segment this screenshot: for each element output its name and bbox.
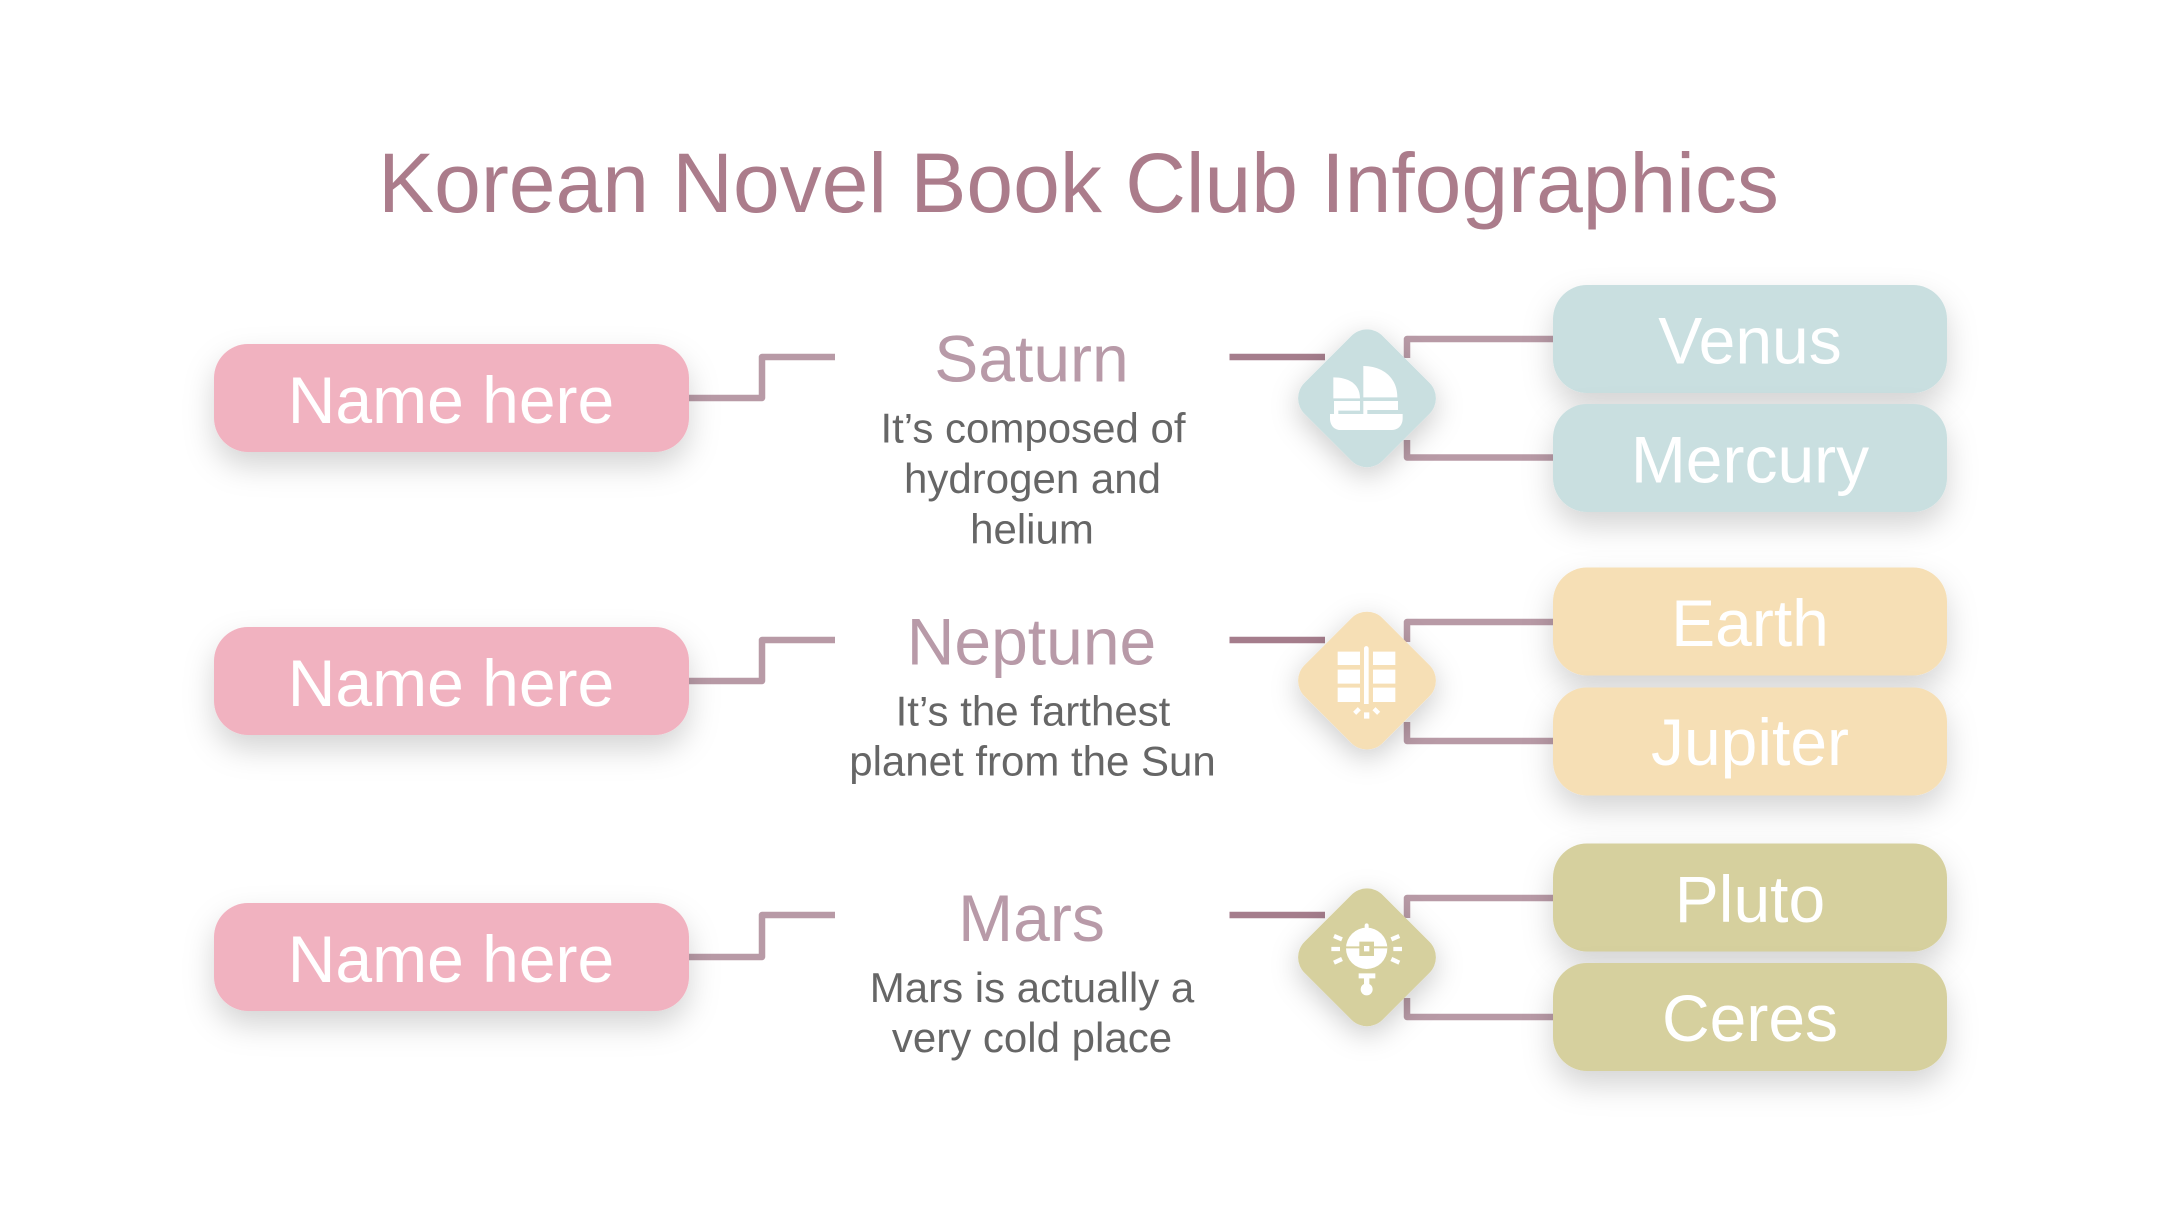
text: Mars: very cold place [892, 1014, 1172, 1061]
pill: Venus: Venus [1658, 304, 1842, 378]
text: Saturn [880, 322, 1186, 552]
connector: icon to Earth and Jupiter [1407, 622, 1553, 741]
pill: Pluto: Pluto [1675, 862, 1825, 936]
pill: name here [214, 344, 689, 452]
icon: ship in diamond [1289, 320, 1445, 476]
text: Mars: Mars [958, 881, 1105, 955]
connector: Saturn to icon [1230, 354, 1325, 360]
pill: Jupiter [1553, 688, 1947, 796]
pill: Jupiter: Jupiter [1651, 705, 1849, 779]
connector: icon to Pluto and Ceres [1407, 898, 1553, 1017]
connector: Neptune to icon [1230, 637, 1325, 643]
text: Neptune [849, 604, 1216, 784]
text: Neptune: It’s the farthest [896, 688, 1171, 734]
pill: Venus [1553, 285, 1947, 393]
pill: name here: Name here [288, 363, 614, 437]
pill: Ceres: Ceres [1662, 981, 1838, 1055]
pill: Ceres [1553, 963, 1947, 1071]
text: Saturn: hydrogen and [904, 455, 1161, 502]
pill: Mercury [1553, 404, 1947, 512]
pill: Pluto [1553, 844, 1947, 952]
row: Neptune [214, 568, 1947, 796]
icon: lamp in diamond [1289, 879, 1445, 1035]
pill: name here [214, 627, 689, 735]
text: Mars [870, 881, 1195, 1061]
pill: Earth [1553, 568, 1947, 676]
title: Korean Novel Book Club Infographics [378, 136, 1779, 230]
pill: name here: Name here [288, 922, 614, 996]
connector: icon to Venus and Mercury [1407, 339, 1553, 458]
connector: name to Neptune [689, 640, 835, 681]
row: Saturn [214, 285, 1947, 552]
text: Saturn: helium [970, 506, 1094, 552]
text: Mars: Mars is actually a [870, 964, 1195, 1011]
pill: name here [214, 903, 689, 1011]
connector: Mars to icon [1230, 912, 1325, 918]
row: Mars [214, 844, 1947, 1071]
pill: name here: Name here [288, 646, 614, 720]
text: Saturn: Saturn [934, 322, 1129, 396]
icon: book in diamond [1289, 603, 1445, 759]
text: Neptune: Neptune [907, 604, 1156, 678]
pill: Mercury: Mercury [1631, 422, 1869, 496]
text: Neptune: planet from the Sun [849, 738, 1216, 784]
connector: name to Mars [689, 915, 835, 957]
pill: Earth: Earth [1671, 586, 1829, 660]
connector: name to Saturn [689, 357, 835, 398]
text: Saturn: It’s composed of [880, 404, 1186, 452]
